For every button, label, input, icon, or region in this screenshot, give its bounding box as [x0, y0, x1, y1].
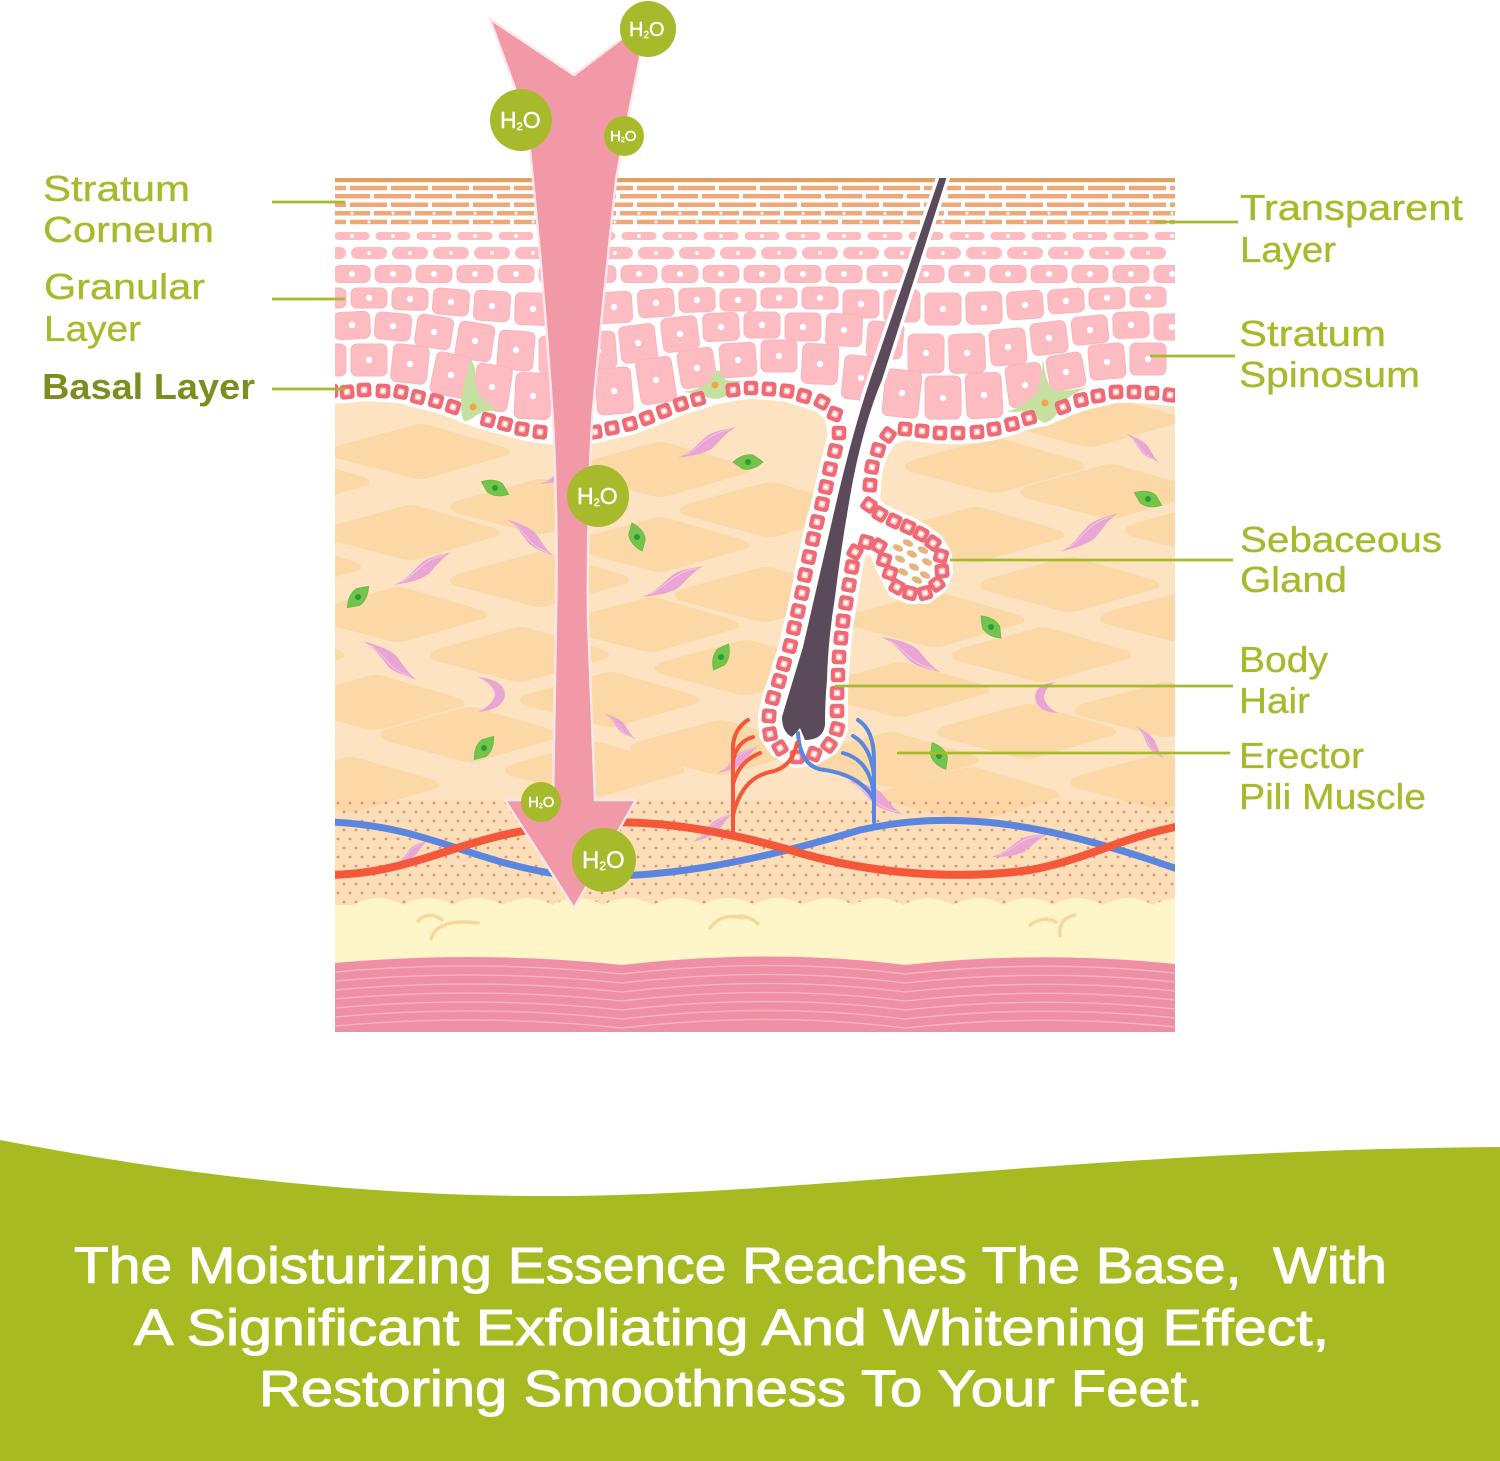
dermis fibroblast cells — [342, 455, 1165, 773]
left labels — [42, 168, 255, 407]
H2O left top: H — [500, 107, 517, 133]
banner text: Restoring Smoothness To Your Feet. — [259, 1360, 1203, 1417]
label: Transparent Layer: Layer — [1240, 229, 1336, 270]
dermis layer — [335, 399, 1175, 905]
H2O large bottom: H — [582, 847, 599, 874]
label: Transparent Layer — [1240, 187, 1463, 270]
H2O small bottom: 2 — [539, 803, 543, 810]
label: Erector Pili Muscle: Erector — [1239, 735, 1364, 776]
H2O large top: O — [649, 19, 665, 41]
basal layer cells — [324, 381, 1178, 764]
granular layer nuclei — [311, 236, 1175, 274]
label: Sebaceous Gland: Sebaceous — [1240, 519, 1442, 560]
label: Stratum Spinosum — [1239, 313, 1420, 395]
label: Body Hair: Hair — [1239, 680, 1310, 721]
stratum corneum brick layers — [309, 180, 1175, 222]
label: Granular Layer: Layer — [44, 308, 141, 349]
leader lines — [272, 202, 1238, 753]
epidermis white background with follicle and gland — [335, 385, 1175, 768]
H2O large bottom: 2 — [599, 859, 606, 873]
label: Erector Pili Muscle: Pili Muscle — [1239, 776, 1426, 817]
label: Stratum Corneum: Corneum — [43, 209, 214, 250]
H2O large top: 2 — [643, 30, 649, 41]
H2O small bottom: O — [543, 794, 554, 811]
granular layer flattened cells — [298, 236, 1175, 253]
H2O mid shaft: H — [577, 483, 594, 509]
H2O large bottom — [572, 828, 636, 892]
label: Transparent Layer: Transparent — [1240, 187, 1463, 228]
melanocyte cells — [461, 358, 1088, 423]
label: Sebaceous Gland — [1240, 519, 1442, 600]
H2O left top: 2 — [517, 121, 523, 133]
H2O large bottom: O — [606, 847, 625, 874]
panel: skin cross-section diagram — [335, 178, 1175, 1032]
H2O left top — [490, 89, 552, 151]
H2O small top — [604, 116, 644, 156]
blood vessel: vein — [330, 720, 1180, 876]
H2O large top: H — [629, 19, 643, 41]
transparent layer nuclei — [311, 213, 1175, 222]
stratum spinosum cells — [293, 287, 1190, 420]
granular layer rectangular cells — [293, 266, 1190, 282]
H2O small bottom: H — [528, 794, 539, 811]
H2O mid shaft: 2 — [594, 497, 600, 509]
label: Erector Pili Muscle — [1239, 735, 1426, 817]
body hair shaft — [782, 170, 949, 740]
banner text: A Significant Exfoliating And Whitening Effect, — [134, 1299, 1329, 1356]
banner text: The Moisturizing Essence Reaches The Base, With — [74, 1237, 1387, 1294]
dotted hypodermis layer — [335, 800, 1175, 908]
bottom banner — [0, 1140, 1500, 1461]
H2O mid shaft — [567, 465, 629, 527]
cell nuclei — [349, 294, 1175, 401]
muscle layer — [335, 956, 1175, 1032]
H2O small bottom — [521, 782, 561, 822]
label: Stratum Spinosum: Stratum — [1239, 313, 1386, 354]
label: Stratum Corneum: Stratum — [43, 168, 190, 209]
subcutaneous fat layer — [335, 898, 1203, 970]
label: Stratum Spinosum: Spinosum — [1239, 354, 1420, 395]
label: Sebaceous Gland: Gland — [1240, 559, 1347, 600]
blood vessel: artery — [330, 720, 1180, 875]
label: Basal Layer: Basal Layer — [42, 366, 255, 407]
label: Body Hair: Body — [1239, 639, 1328, 680]
label: Stratum Corneum — [43, 168, 214, 250]
label: Granular Layer — [44, 266, 205, 349]
right labels — [1239, 187, 1463, 817]
label: Body Hair — [1239, 639, 1328, 721]
H2O large top — [620, 1, 676, 57]
H2O mid shaft: O — [600, 483, 618, 509]
label: Granular Layer: Granular — [44, 266, 205, 307]
arrow: essence penetration — [490, 19, 640, 908]
H2O small top: H — [610, 128, 621, 145]
H2O small top: O — [625, 128, 636, 145]
H2O molecules — [490, 1, 676, 892]
banner text — [74, 1237, 1387, 1417]
elastic fibers — [357, 427, 1170, 864]
H2O left top: O — [523, 107, 541, 133]
H2O small top: 2 — [621, 137, 625, 144]
sebaceous gland contents — [892, 538, 933, 585]
